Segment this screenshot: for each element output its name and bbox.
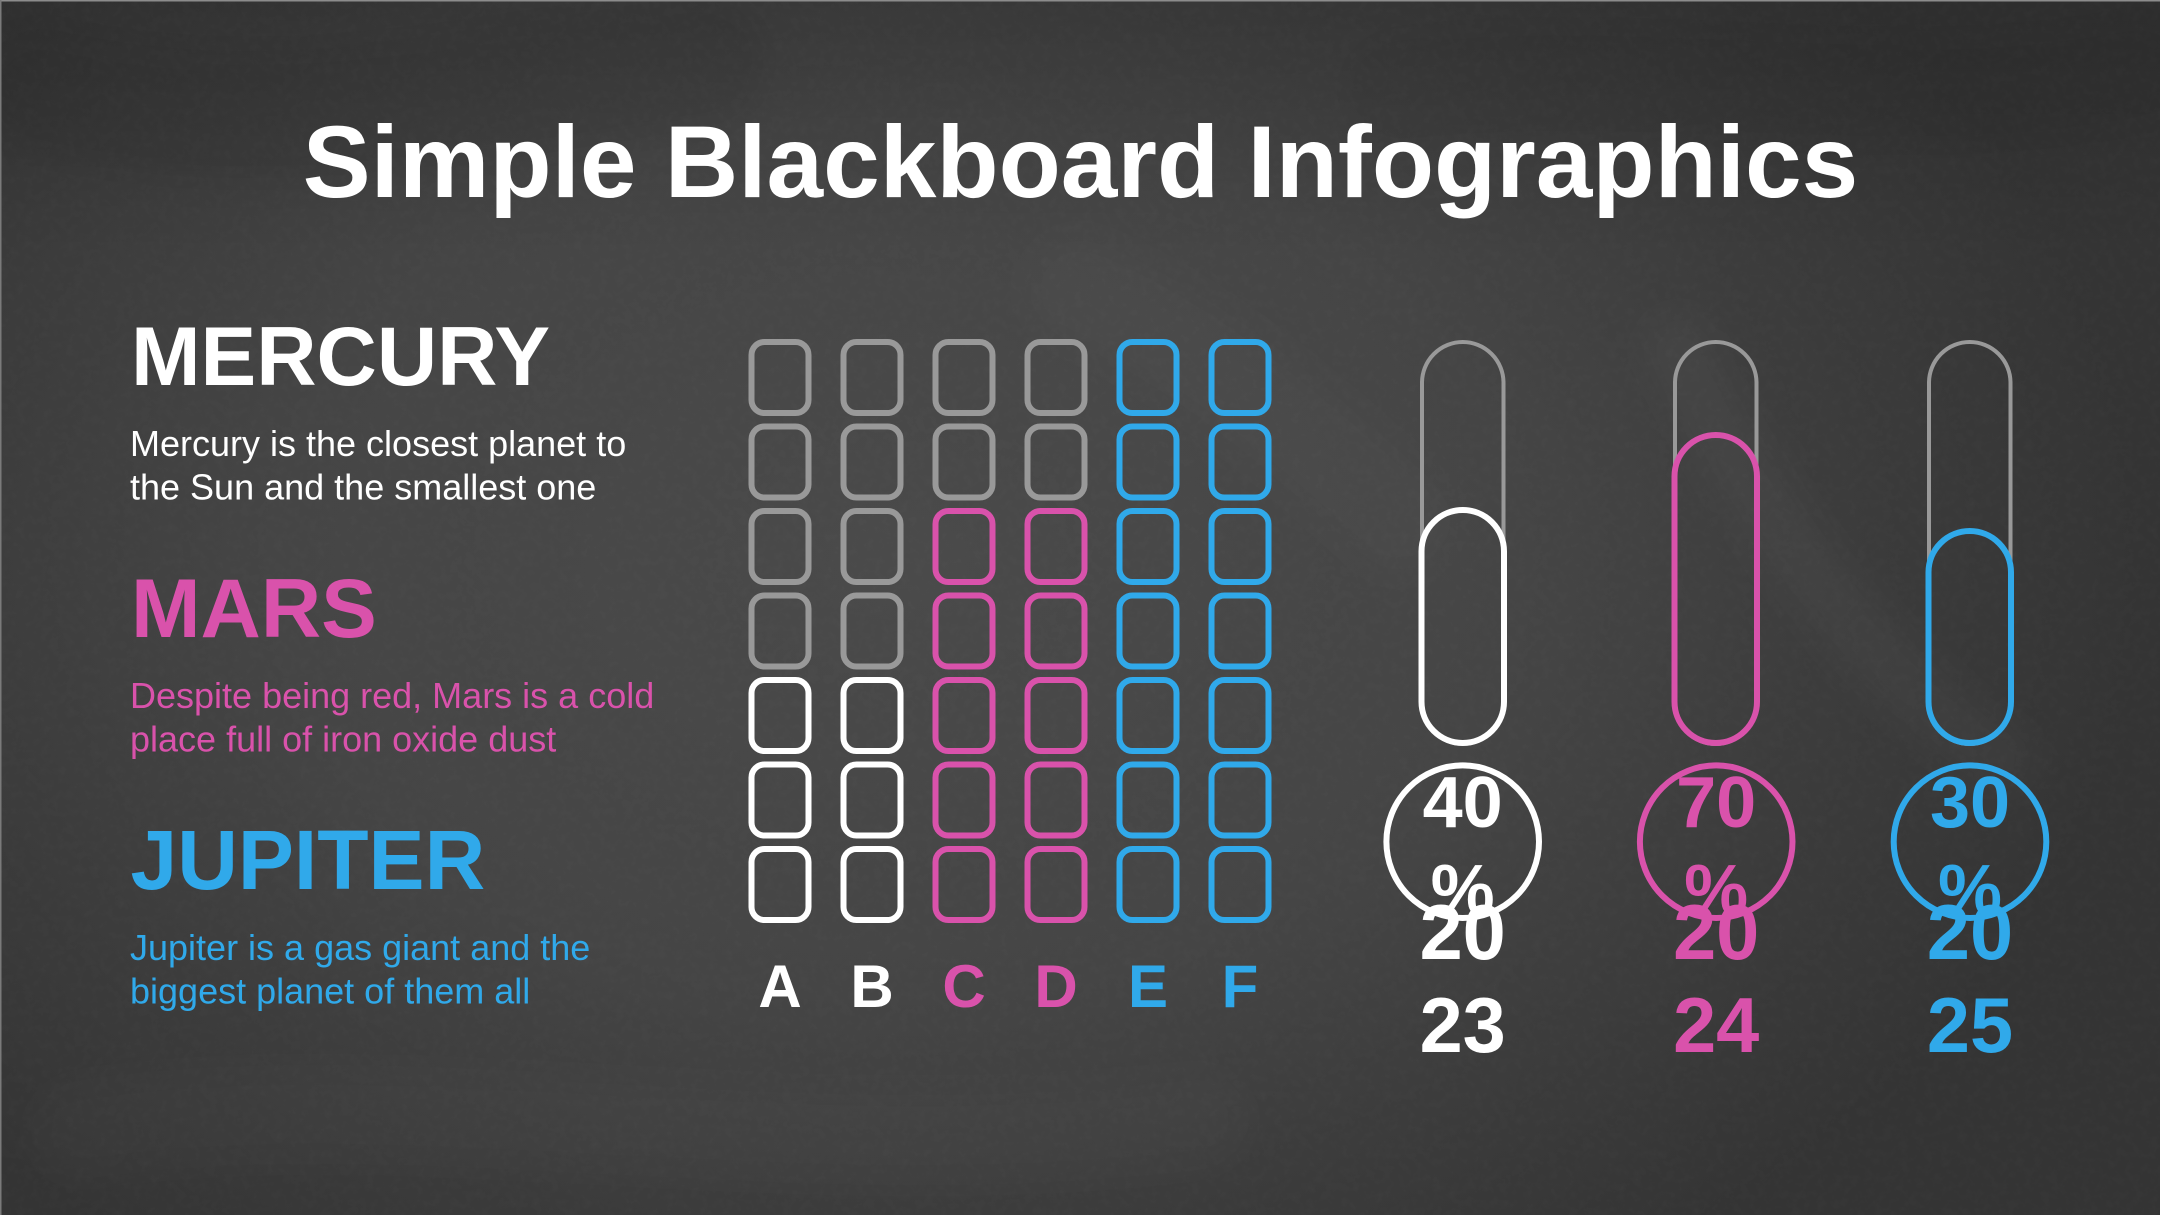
- track: [1422, 342, 1504, 744]
- chart: 2024 gauge: [1640, 342, 1792, 1069]
- year 2023: 23: [1420, 983, 1506, 1069]
- level 30%: [1928, 531, 2011, 743]
- year 2025: 20: [1927, 890, 2013, 976]
- chart: 2023 gauge: [1386, 342, 1539, 1069]
- column A: [752, 342, 808, 920]
- year 2025: 25: [1927, 983, 2013, 1069]
- value 40%: 40: [1423, 763, 1503, 843]
- chart: pictogram grid: [752, 342, 1268, 920]
- heading: Mars: MARS: [131, 561, 377, 655]
- heading: Mercury: MERCURY: [131, 309, 550, 403]
- panel: planet descriptions: [130, 309, 654, 1011]
- year 2024: 24: [1673, 983, 1759, 1069]
- text: Mars description: place full of iron oxide dust: [130, 718, 556, 759]
- value 40%: %: [1431, 851, 1495, 931]
- label D: D: [1034, 953, 1078, 1020]
- ring: [1640, 765, 1792, 918]
- value 30%: 30: [1930, 763, 2010, 843]
- label C: C: [942, 953, 986, 1020]
- label A: A: [758, 953, 802, 1020]
- chart: 2025 gauge: [1894, 342, 2046, 1069]
- track: [1675, 342, 1756, 744]
- label E: E: [1128, 953, 1168, 1020]
- value 70%: 70: [1676, 763, 1756, 843]
- level 70%: [1674, 435, 1757, 743]
- track: [1929, 342, 2010, 744]
- heading: Jupiter: JUPITER: [130, 813, 485, 907]
- column C: [936, 342, 992, 920]
- label F: F: [1222, 953, 1258, 1020]
- column B: [844, 342, 900, 920]
- column D: [1028, 342, 1084, 920]
- level 40%: [1422, 510, 1504, 743]
- column F: [1212, 342, 1268, 920]
- year 2024: 20: [1673, 890, 1759, 976]
- label B: B: [850, 953, 894, 1020]
- column E: [1120, 342, 1176, 920]
- value 30%: %: [1938, 851, 2002, 931]
- value 70%: %: [1684, 851, 1748, 931]
- column labels A to F: [758, 953, 1258, 1020]
- text: Jupiter description: biggest planet of them all: [130, 970, 530, 1011]
- title: Simple Blackboard Infographics: [303, 105, 1858, 219]
- text: Mars description: Despite being red, Mars is a cold: [130, 675, 654, 716]
- text: Jupiter description: Jupiter is a gas giant and the: [130, 927, 590, 968]
- ring: [1894, 765, 2046, 918]
- ring: [1386, 765, 1539, 918]
- text: Mercury description: Mercury is the closest planet to: [130, 423, 626, 464]
- year 2023: 20: [1420, 890, 1506, 976]
- text: Mercury description: the Sun and the smallest one: [130, 466, 596, 507]
